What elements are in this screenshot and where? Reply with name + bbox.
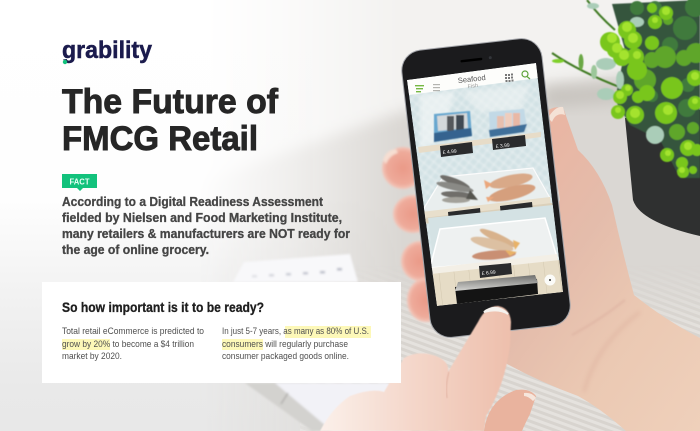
title: The Future of: [62, 83, 279, 121]
panel: intro column: [62, 37, 350, 257]
scroll button: [544, 274, 556, 286]
orange fish: [484, 173, 536, 202]
logo: grability: grability: [62, 37, 153, 64]
text: left column: market by 2020.: [62, 351, 122, 361]
fact text: many retailers & manufacturers are NOT ready for: [62, 226, 350, 241]
price tag: £ 7.50: [503, 209, 517, 216]
app header: Fish: [467, 83, 478, 90]
price tag: £ 5.49: [451, 215, 465, 222]
fact text: [62, 194, 350, 257]
price tag: £ 4.99: [443, 149, 457, 156]
thumb: [484, 390, 536, 431]
title: FMCG Retail: [62, 120, 258, 158]
fact tag: FACT: [70, 176, 90, 186]
fact tag: [62, 174, 97, 191]
text: left column: Total retail eCommerce is predicted to: [62, 326, 204, 336]
text: right column: consumers will regularly purchase: [222, 339, 348, 349]
phone: [42, 36, 573, 431]
notebook: [233, 254, 410, 431]
middle tray: [421, 168, 553, 224]
text: left column: [62, 326, 204, 361]
price tag: £ 6.99: [482, 270, 496, 277]
price tag: £ 3.99: [496, 143, 510, 150]
wood counter: [431, 260, 563, 306]
dark display: [455, 275, 538, 304]
top shelf: [418, 109, 541, 157]
panel: so how important: [42, 282, 401, 383]
text: right column: consumer packaged goods online.: [222, 351, 349, 361]
fish pile: [469, 226, 520, 261]
wrist and palm: [470, 107, 700, 431]
hand holding phone: [378, 107, 700, 431]
product: packaged salmon: [489, 109, 527, 137]
left fingers: [378, 143, 445, 322]
title: [62, 83, 279, 158]
text: right column: [222, 326, 371, 361]
fact text: fielded by Nielsen and Food Marketing Institute,: [62, 210, 342, 225]
panel heading: So how important is it to be ready?: [62, 299, 264, 315]
text: right column: In just 5-7 years, as many as 80% of U.S.: [222, 326, 369, 336]
fact text: According to a Digital Readiness Assessment: [62, 194, 324, 209]
plant: [552, 0, 700, 178]
fact text: the age of online grocery.: [62, 242, 209, 257]
text: left column: grow by 20% to become a $4 trillion: [62, 339, 194, 349]
app header: Seafood: [457, 73, 486, 85]
speaker: [460, 58, 482, 63]
app header: [407, 63, 538, 95]
phone body: [399, 36, 573, 340]
index finger and knuckles: [320, 306, 511, 431]
phone screen: [407, 63, 563, 306]
pointing hand: [320, 306, 536, 431]
lower tray: [428, 205, 563, 306]
dark fish: [436, 173, 478, 203]
product: packaged fish: [434, 111, 472, 142]
plant pot: [625, 110, 700, 236]
